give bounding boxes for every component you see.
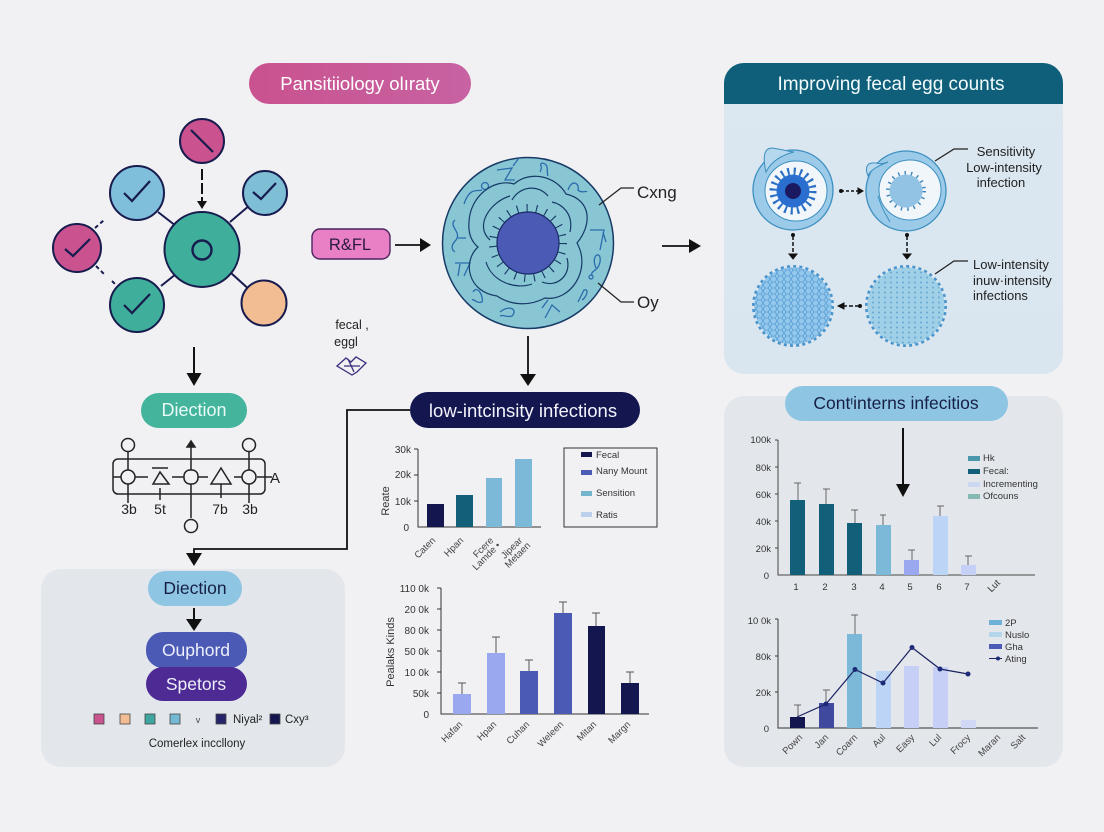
bar chart: peak kinds: Cuhan: [505, 719, 532, 747]
low-intensity infections pill: low-intcinsity infections: [429, 400, 617, 421]
spetors pill: [146, 667, 247, 701]
panel header: [724, 63, 1063, 104]
bar chart: counts 1 to 7: 3: [851, 582, 857, 593]
colour legend: [94, 714, 309, 726]
bar chart: peak kinds: 110 0k: [400, 584, 430, 595]
combo chart: bars and line: 10 0k: [748, 616, 771, 627]
detection pill: Diection: [161, 400, 227, 420]
panel: improving fecal egg counts: [724, 63, 1063, 374]
bar chart: counts 1 to 7: 60k: [756, 490, 771, 501]
callout: Oy: Oy: [637, 293, 659, 312]
legend box: [564, 448, 657, 527]
callout: sensitivity: Sensitivity: [977, 144, 1036, 159]
colour legend: Niyal²: [233, 714, 263, 726]
panel header: Improving fecal egg counts: [777, 74, 1005, 95]
bar chart: peak kinds: Hafan: [439, 719, 465, 745]
squiggles in outer ring: [452, 158, 606, 318]
callout: low-intensity infections: [935, 257, 1052, 303]
chart legend: bottom: Ating: [1005, 654, 1027, 665]
chart legend: top: Hk: [983, 453, 995, 464]
arrow: detection to ouphord: [186, 608, 202, 631]
flower folds: [469, 176, 587, 304]
fecal egg note: fecal ,: [335, 318, 369, 332]
combo chart: bars and line: [748, 615, 1038, 759]
bar chart: peak kinds: Margn: [606, 719, 633, 746]
arrow: network to detection: [186, 347, 202, 386]
combo chart: bars and line: Pown: [781, 732, 805, 757]
callout: Cxng: [599, 183, 677, 205]
title pill: [249, 63, 471, 104]
bar chart: counts 1 to 7: 1: [793, 582, 799, 593]
callout: low-intensity infections: inuw·intensity: [973, 273, 1052, 288]
circuit diagram: 5t: [154, 501, 166, 517]
arrow: egg to low-intensity pill: [520, 336, 536, 386]
circuit diagram: 3b: [121, 501, 137, 517]
bar chart: peak kinds: 10 0k: [405, 668, 430, 679]
chart legend: bottom: [989, 618, 1029, 665]
callout: sensitivity: [935, 144, 1042, 190]
chart legend: bottom: Nuslo: [1005, 630, 1029, 641]
combo chart: bars and line: Maran: [976, 732, 1003, 759]
egg: dark nucleus: [753, 148, 833, 230]
pill heading: Contᶦinterns infecitios: [813, 393, 979, 413]
callout: Oy: [598, 283, 659, 312]
legend box: Ratis: [596, 510, 618, 521]
combo chart: bars and line: Aul: [871, 732, 888, 750]
spiky textured cell right: [866, 266, 946, 346]
bar chart: peak kinds: 0: [423, 710, 429, 721]
bar chart: counts 1 to 7: [750, 435, 1035, 595]
circuit diagram: 7b: [212, 501, 228, 517]
bar chart: peak kinds: Hpan: [475, 719, 499, 743]
bar chart: counts 1 to 7: 4: [879, 582, 885, 593]
bar chart: peak kinds: 50k: [413, 689, 430, 700]
bar chart: rates: Jipear: [499, 535, 525, 561]
bar chart: counts 1 to 7: 20k: [756, 544, 771, 555]
ouphord pill: Ouphord: [162, 640, 230, 660]
legend box: Nany Mount: [596, 466, 648, 477]
bar chart: rates: Fcere: [471, 535, 496, 560]
bar chart: peak kinds: [385, 584, 649, 750]
bar chart: counts 1 to 7: 5: [907, 582, 913, 593]
combo chart: bars and line: Jan: [813, 732, 831, 751]
legend caption: Comerlex inccllony: [149, 738, 245, 750]
colour legend: Cxy³: [285, 714, 309, 726]
radial hairs: [493, 208, 563, 278]
bar chart: rates: Lamde •: [471, 540, 503, 573]
bar chart: counts 1 to 7: 6: [936, 582, 942, 593]
circuit diagram: 3b: [242, 501, 258, 517]
bar chart: peak kinds: Weleen: [536, 719, 566, 750]
chart legend: top: Incrementing: [983, 479, 1038, 490]
combo chart: bars and line: 20k: [756, 688, 771, 699]
icon: small parasite: [337, 357, 366, 375]
chart legend: bottom: Gha: [1005, 642, 1024, 653]
arrow down into chart: [896, 428, 910, 497]
combo chart: bars and line: Frocy: [949, 732, 973, 757]
legend box: Fecal: [596, 450, 619, 461]
bar chart: peak kinds: 50 0k: [405, 647, 430, 658]
fecal egg note: [334, 318, 369, 375]
bar chart: rates: 20k: [395, 470, 412, 481]
network diagram: [53, 119, 287, 332]
arrow: egg to right panel: [662, 239, 701, 253]
bar chart: rates: Reate: [380, 486, 392, 516]
panel: detection workflow: [41, 569, 345, 767]
spiky textured cell left: [754, 266, 832, 346]
R&FL label: R&FL: [329, 236, 371, 254]
connector: low-intensity infections to detection panel: [186, 410, 410, 566]
bar chart: counts 1 to 7: 2: [822, 582, 828, 593]
nucleus: [497, 212, 559, 274]
bar chart: peak kinds: 20 0k: [405, 605, 430, 616]
circuit diagram: A: [270, 470, 280, 487]
central egg diagram: [442, 158, 614, 328]
callout: low-intensity infections: infections: [973, 288, 1028, 303]
bar chart: peak kinds: Pealaks Kinds: [385, 617, 397, 687]
combo chart: bars and line: 80k: [756, 652, 771, 663]
dashed arrows between cells: [789, 188, 911, 309]
bar chart: peak kinds: 80 0k: [405, 626, 430, 637]
bar chart: counts 1 to 7: 80k: [756, 463, 771, 474]
bar chart: rates: Metaen: [503, 540, 533, 571]
colour legend: v: [196, 715, 201, 725]
egg: pale nucleus: [866, 151, 946, 231]
chart legend: top: Fecal:: [983, 466, 1009, 477]
combo chart: bars and line: Easy: [894, 732, 917, 755]
bar chart: counts 1 to 7: 7: [964, 582, 970, 593]
bar chart: rates: [380, 445, 541, 573]
combo chart: bars and line: Lul: [927, 732, 944, 749]
circuit diagram: [113, 438, 280, 532]
low-intensity infections pill: [410, 392, 640, 428]
combo chart: bars and line: 0: [764, 724, 769, 735]
ouphord pill: [146, 632, 247, 668]
combo chart: bars and line: Salt: [1009, 732, 1028, 752]
bar chart: counts 1 to 7: 40k: [756, 517, 771, 528]
bar chart: rates: 10k: [395, 497, 412, 508]
panel: continuous infections: [724, 386, 1063, 767]
chart legend: bottom: 2P: [1005, 618, 1017, 629]
bar chart: rates: Hpan: [442, 535, 466, 559]
title pill: Pansitiiology olıraty: [280, 73, 440, 94]
bar chart: counts 1 to 7: 0: [764, 571, 769, 582]
bar chart: rates: Caten: [412, 535, 438, 561]
combo chart: bars and line: Coarn: [834, 732, 860, 758]
callout: sensitivity: infection: [977, 175, 1025, 190]
legend box: Sensition: [596, 488, 635, 499]
bar chart: rates: 30k: [395, 445, 412, 456]
trend line: [797, 645, 970, 717]
bar chart: rates: 0: [403, 523, 409, 534]
fecal egg note: eggl: [334, 335, 358, 349]
chart legend: top: Ofcouns: [983, 491, 1019, 502]
bar chart: counts 1 to 7: 100k: [750, 435, 771, 446]
detection pill, blue: [148, 571, 242, 606]
callout: sensitivity: Low-intensity: [966, 160, 1042, 175]
arrow: R&FL to egg: [395, 238, 431, 252]
callout: low-intensity infections: Low-intensity: [973, 257, 1049, 272]
callout: Cxng: Cxng: [637, 183, 677, 202]
R&FL label: [312, 229, 390, 259]
bar chart: counts 1 to 7: Lut: [986, 577, 1003, 595]
spetors pill: Spetors: [166, 674, 226, 694]
pill heading: [785, 386, 1008, 421]
bar chart: peak kinds: Mitan: [575, 719, 599, 744]
detection pill: [141, 393, 247, 428]
detection pill, blue: Diection: [163, 578, 227, 598]
chart legend: top: [968, 453, 1038, 502]
